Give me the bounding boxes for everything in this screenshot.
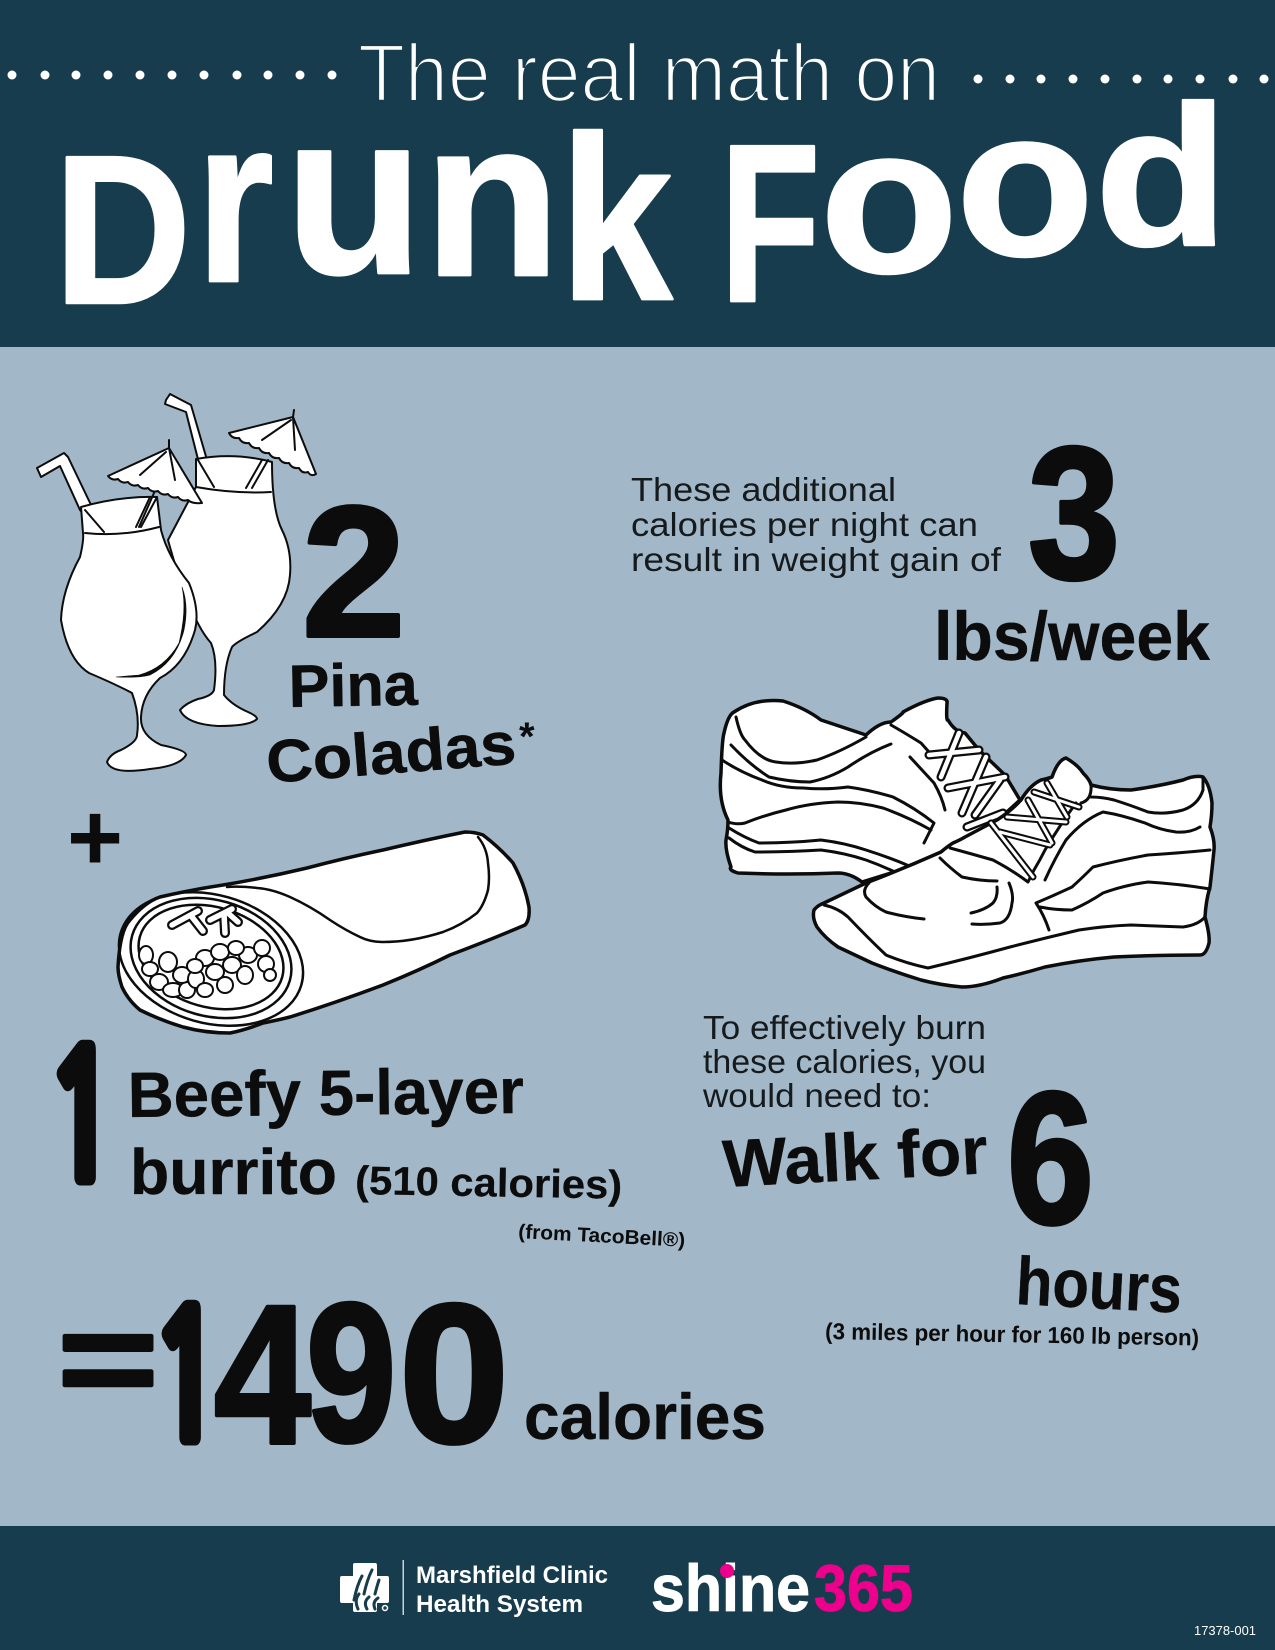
- burrito lettuce: [172, 909, 238, 933]
- illustration: running shoes: [720, 698, 1214, 987]
- title: Drunk Food: d: [1095, 65, 1228, 288]
- text block: weight gain: These additional: [631, 471, 896, 508]
- title line: The real math on: The real math on: [358, 28, 940, 119]
- total: =1490 calories: 4: [214, 1264, 311, 1485]
- text block: weight gain: calories per night can: [631, 506, 978, 543]
- text block: weight gain: [631, 471, 1002, 578]
- text block: burn calories: [702, 1009, 986, 1114]
- text block: burn calories: would need to:: [702, 1077, 931, 1114]
- logo: shine365: [651, 1551, 913, 1625]
- label: Beefy 5-layer burrito: [127, 1055, 623, 1208]
- label: Beefy 5-layer burrito: burrito: [130, 1136, 337, 1208]
- title: Drunk Food: r: [196, 69, 274, 332]
- front umbrella: [108, 440, 202, 503]
- total: =1490 calories: 1: [150, 1291, 225, 1466]
- back umbrella: [229, 410, 316, 475]
- footer band: [0, 1526, 1275, 1650]
- label: Walk for: Walk for: [721, 1113, 989, 1202]
- plus sign: +: [67, 784, 123, 891]
- logo divider: [402, 1560, 404, 1615]
- logo: Marshfield cross: [340, 1563, 389, 1612]
- label: Pina Coladas: Pina: [288, 651, 419, 720]
- total: =1490 calories: 9: [306, 1263, 396, 1484]
- total: =1490 calories: 0: [399, 1263, 509, 1484]
- source note: from TacoBell: (from TacoBell®): [518, 1221, 686, 1252]
- label: Pina Coladas: [264, 651, 535, 796]
- text block: burn calories: To effectively burn: [703, 1009, 986, 1046]
- burrito beef filling: [139, 940, 276, 998]
- big number 2: 2: [302, 469, 405, 676]
- note: walking pace: (3 miles per hour for 160 lb person): [825, 1318, 1199, 1351]
- dotted rule left: [8, 70, 336, 80]
- label: lbs/week: lbs/week: [934, 598, 1211, 675]
- dotted rule right: [974, 74, 1268, 84]
- title: Drunk Food: o: [956, 67, 1094, 300]
- back glass: [168, 456, 290, 726]
- big number 1: 1: [45, 1031, 120, 1206]
- label: Pina Coladas: *: [519, 715, 535, 759]
- front shoe: [813, 758, 1214, 987]
- title: Drunk Food: D: [54, 111, 191, 348]
- glass highlight: [116, 587, 186, 677]
- title: Drunk Food: o: [820, 84, 958, 317]
- total: =1490 calories: =: [58, 1286, 158, 1432]
- label: hours: hours: [1014, 1243, 1184, 1328]
- label: Beefy 5-layer burrito: Beefy 5-layer: [127, 1055, 524, 1131]
- big number 3: 3: [1028, 408, 1120, 618]
- burrito rings: [103, 872, 319, 1046]
- total: =1490 calories: calories: [524, 1380, 766, 1453]
- logo text: Marshfield Clinic Health System: [416, 1562, 608, 1618]
- title: Drunk Food: k: [560, 90, 673, 349]
- label: Beefy 5-layer burrito: (510 calories): [355, 1159, 623, 1208]
- label: Pina Coladas: Coladas: [264, 710, 518, 796]
- job code: 17378-001: [1194, 1623, 1256, 1638]
- title: Drunk Food: F: [720, 98, 820, 349]
- text block: weight gain: result in weight gain of: [631, 541, 1002, 578]
- total: =1490 calories: [58, 1263, 766, 1485]
- illustration: two pina colada glasses: [37, 394, 316, 771]
- title: Drunk Food: [54, 65, 1228, 349]
- header band: [0, 0, 1275, 349]
- front glass: [61, 497, 197, 771]
- back shoe: [720, 698, 1020, 882]
- logo: shine365: 365: [814, 1551, 913, 1625]
- front straw: [37, 453, 108, 534]
- title: Drunk Food: u: [285, 66, 423, 322]
- logo text: Marshfield Clinic Health System: Health System: [416, 1591, 583, 1618]
- logo text: Marshfield Clinic Health System: Marshfield Clinic: [416, 1562, 608, 1589]
- illustration: burrito: [103, 832, 529, 1046]
- back straw: [165, 394, 214, 487]
- big number 6: 6: [1007, 1053, 1094, 1263]
- logo: shine365: shine: [651, 1551, 810, 1625]
- text block: burn calories: these calories, you: [703, 1043, 986, 1080]
- title: Drunk Food: n: [424, 75, 560, 323]
